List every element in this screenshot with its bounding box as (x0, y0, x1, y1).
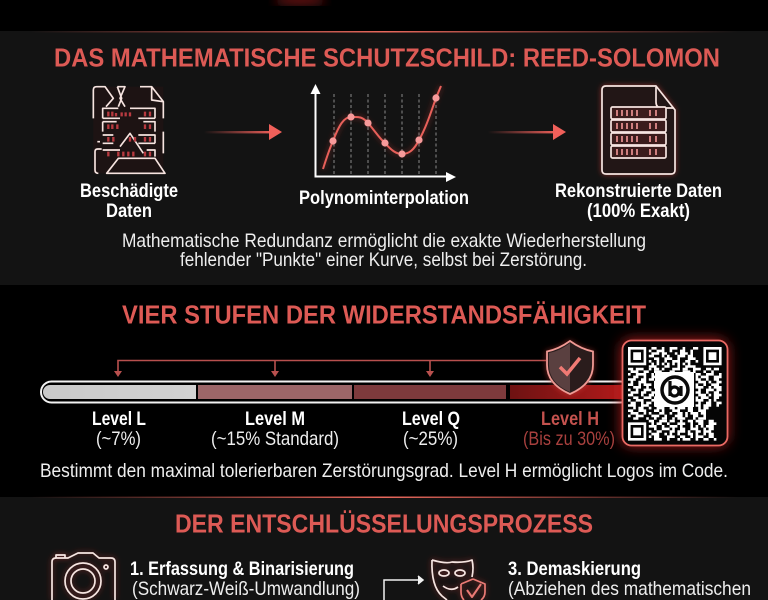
level M: (~15% Standard) (211, 428, 339, 450)
step 1 text (130, 558, 360, 600)
label: reconstructed data: Rekonstruierte Daten (555, 180, 722, 202)
chart: polynomial interpolation (310, 84, 456, 182)
arrows: level pointers (114, 360, 550, 377)
level H: Level H (541, 408, 599, 430)
heading: decoding: DER ENTSCHLÜSSELUNGSPROZESS (175, 508, 593, 538)
level Q (402, 408, 460, 450)
step 3 text: 3. Demaskierung (508, 558, 641, 580)
label: reconstructed data (555, 180, 722, 222)
panel: Reed-Solomon (0, 31, 768, 285)
progress bar (41, 382, 631, 402)
level H: (Bis zu 30%) (523, 428, 615, 450)
level M (211, 408, 339, 450)
panel: decoding process (0, 496, 768, 600)
level Q: (~25%) (403, 428, 458, 450)
arrow: interpolation to reconstructed (488, 124, 566, 140)
text: redundancy explanation: Mathematische Redundanz ermöglicht die exakte Wiederherstellung (122, 230, 646, 252)
label: damaged data (80, 180, 178, 222)
top glow remnant (274, 0, 326, 5)
level M: Level M (245, 408, 305, 430)
step 1 text: (Schwarz-Weiß-Umwandlung) (132, 578, 360, 600)
text: redundancy explanation (122, 230, 646, 271)
level Q: Level Q (402, 408, 460, 430)
icon: damaged document (93, 87, 165, 173)
arrow: damaged to interpolation (204, 124, 282, 140)
icon: shield (546, 340, 594, 395)
heading: Reed-Solomon: DAS MATHEMATISCHE SCHUTZSCHILD: REED-SOLOMON (54, 42, 720, 72)
step 3 text (508, 558, 751, 600)
level L (92, 408, 146, 450)
level H (523, 408, 615, 450)
icon: mask (432, 560, 485, 600)
level L: (~7%) (96, 428, 141, 450)
step 1 text: 1. Erfassung & Binarisierung (130, 558, 354, 580)
level L: Level L (92, 408, 146, 430)
QR code with logo (622, 340, 728, 446)
label: polynomial interpolation: Polynominterpolation (299, 187, 469, 209)
icon: reconstructed document (602, 86, 675, 174)
arrow: to step 3 (384, 576, 423, 600)
text: redundancy explanation: fehlender "Punkte" einer Kurve, selbst bei Zerstörung. (180, 249, 587, 271)
label: damaged data: Beschädigte (80, 180, 178, 202)
heading: levels: VIER STUFEN DER WIDERSTANDSFÄHIGKEIT (122, 300, 646, 330)
panel: resistance levels (40, 300, 728, 482)
icon: camera (52, 553, 115, 600)
label: reconstructed data: (100% Exakt) (587, 200, 690, 222)
label: damaged data: Daten (106, 200, 152, 222)
